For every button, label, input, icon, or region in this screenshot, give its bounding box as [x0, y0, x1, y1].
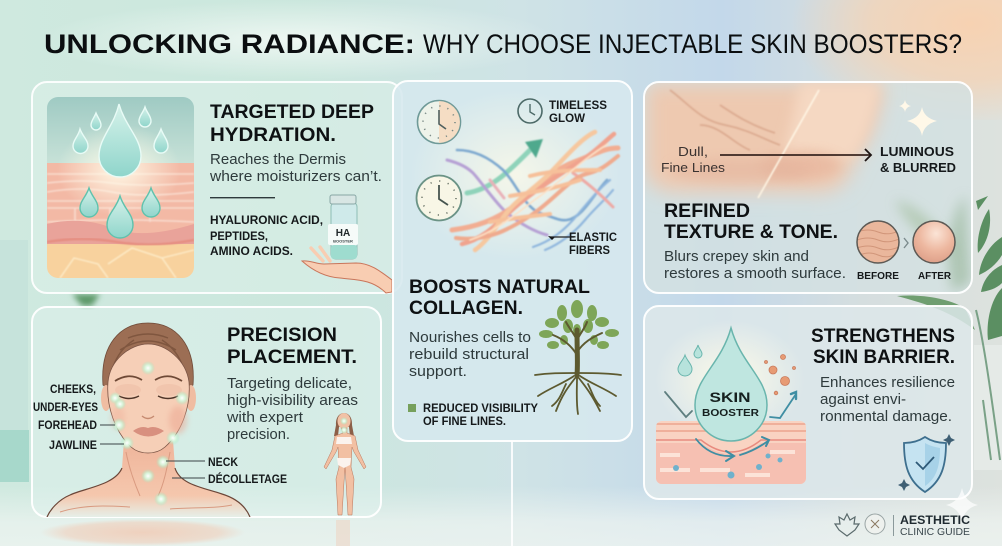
fiber and glow labels: FIBERS: [569, 245, 610, 257]
ingredients list: [210, 215, 323, 258]
icon: timeless clock: [518, 99, 542, 123]
body text: [409, 330, 531, 380]
icon: tree with roots: [535, 300, 621, 414]
heading: [210, 101, 374, 146]
ingredients list: HYALURONIC ACID,: [210, 215, 323, 227]
ingredients list: PEPTIDES,: [210, 231, 268, 243]
fiber and glow labels: ELASTIC: [569, 232, 617, 244]
icon: skin booster drop: SKIN: [710, 389, 750, 405]
fiber and glow labels: TIMELESS: [549, 100, 607, 112]
body text: Nourishes cells to: [409, 330, 531, 346]
body text: where moisturizers can’t.: [209, 169, 382, 185]
heading: PRECISION: [227, 324, 337, 346]
body text: [209, 152, 382, 185]
body text: rebuild structural: [409, 347, 529, 363]
sparkle: floor corner glint: [946, 488, 978, 521]
title: UNLOCKING RADIANCE:: [44, 29, 415, 59]
icon: shield with check: [898, 434, 955, 492]
treatment area labels: CHEEKS,: [50, 384, 96, 396]
body text: support.: [409, 364, 467, 380]
heading: STRENGTHENS: [811, 325, 955, 347]
panel: refined texture and tone: [644, 82, 972, 293]
heading: SKIN BARRIER.: [813, 346, 955, 368]
body text: [820, 375, 955, 425]
treatment area labels: NECK: [208, 457, 239, 469]
transformation labels: & BLURRED: [880, 161, 956, 175]
treatment area labels: DÉCOLLETAGE: [208, 473, 287, 486]
body text: ronmental damage.: [820, 409, 952, 425]
body text: [226, 376, 358, 443]
heading: BOOSTS NATURAL: [409, 276, 590, 298]
heading: PLACEMENT.: [227, 346, 357, 368]
icon: small droplets: [678, 345, 702, 376]
heading: [664, 200, 838, 243]
body text: restores a smooth surface.: [664, 266, 846, 282]
icon: skin booster drop: [695, 328, 767, 441]
body text: Blurs crepey skin and: [664, 249, 809, 265]
before and after labels: BEFORE: [857, 271, 899, 282]
illustration: face with treatment points: [47, 323, 250, 517]
arrow: dull to luminous: [720, 149, 871, 161]
transformation labels: Fine Lines: [661, 160, 726, 175]
transformation labels: [661, 144, 956, 175]
icon: environmental particles: [764, 354, 796, 395]
bullet: reduced visibility: OF FINE LINES.: [423, 416, 506, 428]
panel: boosts natural collagen: [393, 81, 632, 441]
icon: clock, morning: [418, 100, 460, 144]
before and after labels: AFTER: [918, 271, 952, 282]
illustration: droplets entering skin layers: [47, 97, 194, 278]
logo: aesthetic clinic guide: CLINIC GUIDE: [900, 527, 970, 538]
title: [44, 29, 962, 59]
treatment area labels: [33, 384, 287, 486]
panel: precision placement: [32, 307, 381, 517]
treatment area labels: JAWLINE: [49, 440, 97, 452]
fiber and glow labels: GLOW: [549, 113, 585, 125]
heading: TEXTURE & TONE.: [664, 221, 838, 243]
heading: REFINED: [664, 200, 750, 222]
body text: [664, 249, 846, 282]
arrows: deflected stressors and flow: [665, 392, 796, 461]
icon: HA booster vial on hand: BOOSTER: [333, 238, 353, 244]
panel: strengthens skin barrier: [644, 306, 972, 499]
bullet: reduced visibility: [408, 403, 538, 428]
heading: HYDRATION.: [210, 124, 336, 146]
icon: HA booster vial on hand: HA: [336, 228, 350, 239]
body text: Targeting delicate,: [227, 376, 352, 392]
heading: [811, 325, 955, 368]
heading: COLLAGEN.: [409, 297, 523, 319]
before and after labels: [857, 271, 952, 282]
illustration: skin layers: [656, 421, 806, 484]
icon: HA booster vial on hand: [302, 195, 392, 293]
body text: Enhances resilience: [820, 375, 955, 391]
illustration: collagen and elastic fibers: [447, 132, 618, 250]
icon: skin booster drop: BOOSTER: [702, 407, 759, 419]
bullet: reduced visibility: REDUCED VISIBILITY: [423, 403, 538, 415]
ingredients list: AMINO ACIDS.: [210, 246, 293, 258]
icon: before skin swatch: [857, 221, 899, 263]
body text: against envi-: [820, 392, 906, 408]
icon: sparkles: [899, 100, 937, 136]
icon: clock, evening: [416, 176, 462, 220]
logo: aesthetic clinic guide: AESTHETIC: [900, 515, 970, 527]
body text: with expert: [226, 410, 303, 426]
icon: after skin swatch: [913, 221, 955, 263]
heading: [409, 276, 590, 319]
body text: precision.: [227, 427, 290, 443]
photo: neck skin before and after: [645, 83, 971, 292]
heading: [227, 324, 357, 368]
icon: small body figure: [324, 413, 366, 515]
transformation labels: LUMINOUS: [880, 145, 954, 159]
panel: targeted deep hydration: [32, 82, 402, 293]
heading: TARGETED DEEP: [210, 101, 374, 123]
treatment area labels: FOREHEAD: [38, 420, 97, 432]
logo: aesthetic clinic guide: [835, 514, 970, 538]
body text: high-visibility areas: [227, 393, 358, 409]
fiber and glow labels: [549, 100, 617, 257]
body text: Reaches the Dermis: [210, 152, 346, 168]
transformation labels: Dull,: [678, 144, 708, 159]
treatment area labels: UNDER-EYES: [33, 402, 98, 414]
